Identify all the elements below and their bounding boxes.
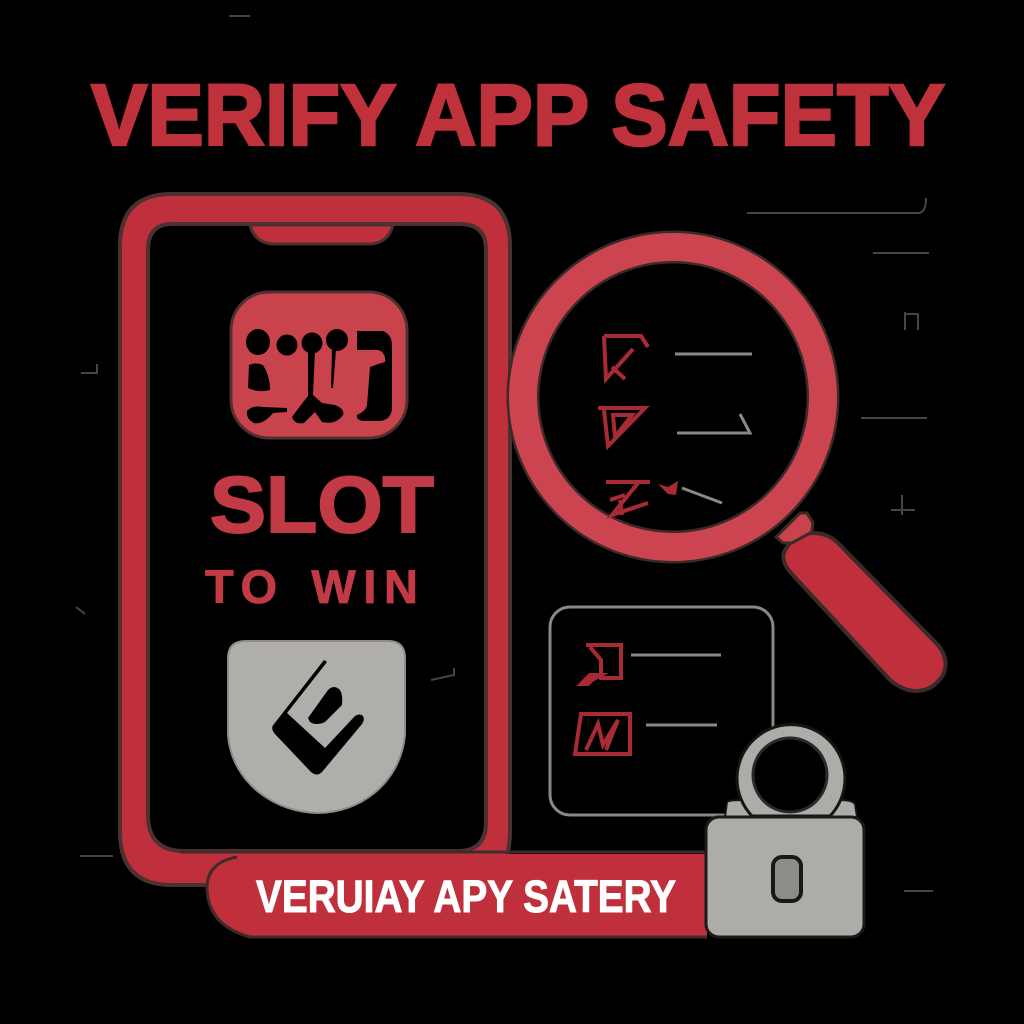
lock shackle opening [753, 738, 827, 812]
banner text: VERUIAY APY SATERY [256, 871, 676, 922]
magnifier handle [783, 533, 946, 691]
checklist card [550, 607, 773, 815]
padlock [706, 725, 864, 937]
phone [120, 194, 510, 885]
lock shackle [737, 725, 845, 816]
phone notch [250, 225, 393, 244]
shield logo [272, 660, 364, 774]
magnifier checklist [598, 336, 752, 515]
title: VERIFY APP SAFETY [91, 67, 945, 164]
bottom banner [180, 852, 707, 937]
magnifier neck [776, 513, 813, 543]
shield badge [228, 641, 405, 813]
lock keyhole [773, 857, 801, 901]
card item one [581, 645, 721, 684]
shield logo slot [308, 687, 342, 724]
magnifier ring [523, 247, 823, 547]
app icon [231, 292, 407, 438]
card item two [575, 714, 717, 754]
magnifying glass [523, 247, 946, 691]
slot label: SLOT [210, 460, 434, 549]
banner fill [207, 854, 707, 937]
app icon glyphs [246, 329, 392, 423]
lock collar [725, 800, 857, 817]
lock body [706, 817, 864, 937]
phone body [120, 194, 510, 885]
to win label: TO WIN [205, 560, 418, 613]
